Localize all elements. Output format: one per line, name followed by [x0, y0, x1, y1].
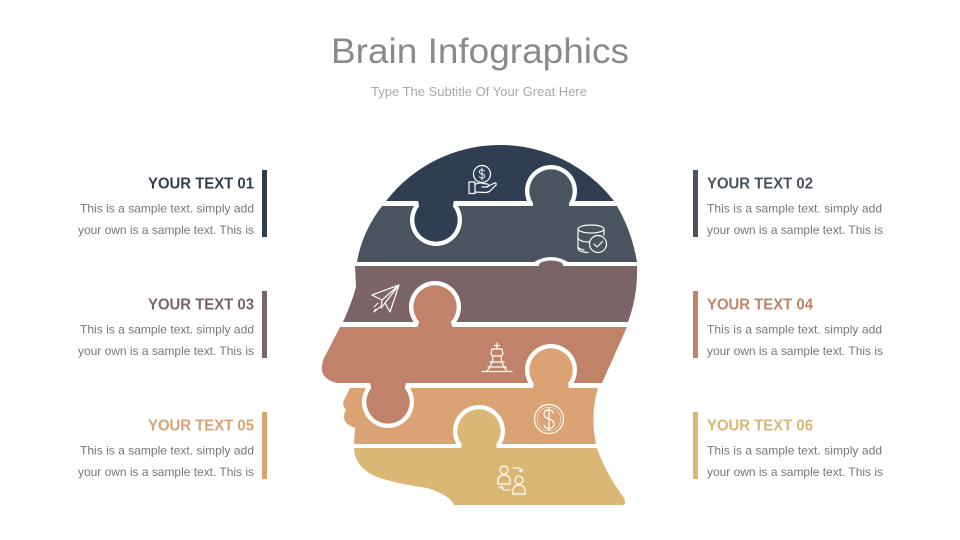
head puzzle graphic [322, 145, 637, 505]
icon: two people exchange [498, 466, 525, 494]
body text 04: This is a sample text. simply add [707, 322, 882, 336]
accent bar 06 [693, 412, 698, 479]
puzzle piece 1: navy crown [386, 145, 614, 201]
heading 02: YOUR TEXT 02 [707, 176, 813, 192]
body text 03 [78, 322, 254, 358]
accent bar 05 [262, 412, 267, 479]
panel: text 03 [78, 291, 267, 358]
body text 05: your own is a sample text. This is [78, 465, 254, 479]
body text 02: This is a sample text. simply add [707, 202, 882, 216]
puzzle piece 5: tan [343, 388, 598, 444]
accent bar 02 [693, 170, 698, 237]
icon: paper plane [372, 285, 399, 312]
puzzle piece 6: sand [354, 448, 625, 505]
knob: terracotta into mauve [409, 281, 461, 327]
body text 02 [707, 202, 883, 237]
body text 04: your own is a sample text. This is [707, 344, 883, 358]
heading 01: YOUR TEXT 01 [148, 176, 254, 192]
panel: text 05 [78, 412, 267, 479]
icon: hand holding coin [469, 166, 496, 194]
icon: chess king [482, 343, 512, 372]
body text 06 [707, 444, 883, 479]
panel: text 06 [693, 412, 883, 479]
body text 05: This is a sample text. simply add [80, 444, 254, 458]
knob: slate into navy [525, 165, 577, 206]
body text 03: your own is a sample text. This is [78, 344, 254, 358]
knob: navy into slate [410, 201, 462, 246]
subtitle: Type The Subtitle Of Your Great Here [371, 84, 587, 99]
knob: tan into terracotta [525, 344, 577, 388]
puzzle piece 3: mauve [343, 266, 637, 322]
puzzle piece 2: slate [357, 206, 637, 262]
body text 05 [78, 444, 254, 479]
accent bar 01 [262, 170, 267, 237]
heading 05: YOUR TEXT 05 [148, 418, 254, 434]
body text 03: This is a sample text. simply add [80, 322, 254, 336]
heading 03: YOUR TEXT 03 [148, 296, 254, 314]
body text 04 [707, 322, 883, 358]
body text 06: your own is a sample text. This is [707, 465, 883, 479]
puzzle piece 4: terracotta [322, 327, 627, 383]
knob: sand into tan [453, 405, 505, 448]
panel: text 04 [693, 291, 883, 358]
accent bar 03 [262, 291, 267, 358]
body text 02: your own is a sample text. This is [707, 223, 883, 237]
body text 01 [78, 202, 254, 237]
panel: text 01 [78, 170, 267, 237]
body text 06: This is a sample text. simply add [707, 444, 882, 458]
body text 01: This is a sample text. simply add [80, 202, 254, 216]
accent bar 04 [693, 291, 698, 358]
title: Brain Infographics [331, 32, 629, 71]
panel: text 02 [693, 170, 883, 237]
knob: mauve into slate [534, 257, 568, 267]
heading 04: YOUR TEXT 04 [707, 296, 813, 314]
heading 06: YOUR TEXT 06 [707, 418, 813, 434]
knob: terracotta into tan [362, 383, 414, 428]
body text 01: your own is a sample text. This is [78, 223, 254, 237]
icon: database check [578, 225, 606, 252]
icon: dollar coin [534, 404, 564, 434]
